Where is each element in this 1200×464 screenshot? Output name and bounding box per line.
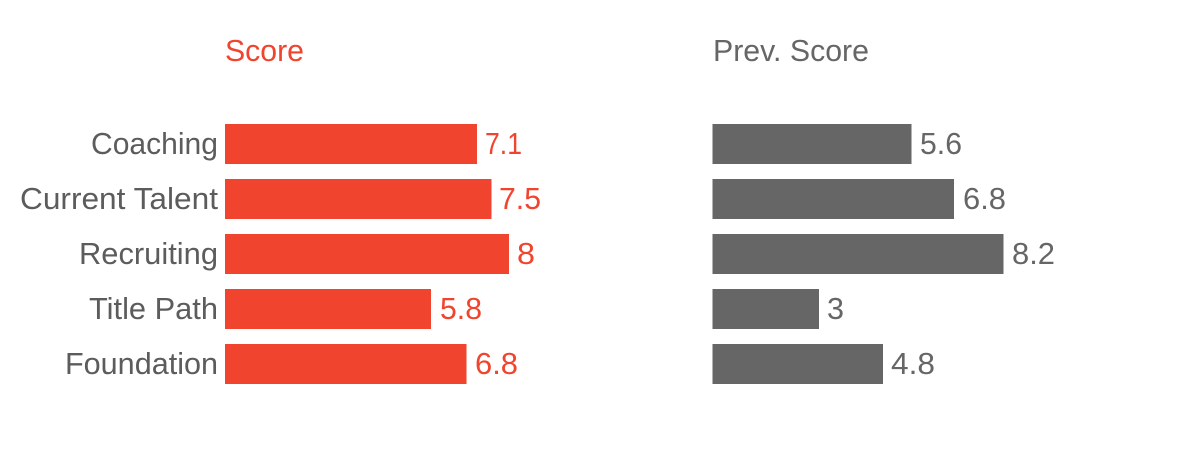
bar: Recruiting 8: [225, 234, 509, 274]
panel: Score bars: [225, 33, 541, 384]
value: 4.8: 4.8: [891, 346, 935, 381]
value: 6.8: 6.8: [963, 181, 1006, 216]
bar: Current Talent 7.5: [225, 179, 492, 219]
value: 8.2: 8.2: [1012, 236, 1055, 271]
value: 6.8: 6.8: [475, 346, 518, 381]
label: Current Talent: Current Talent: [20, 181, 218, 216]
value: 5.6: 5.6: [920, 126, 962, 161]
value: 3: 3: [827, 291, 844, 326]
bar: Title Path 3: [712, 289, 819, 329]
bar: Coaching 7.1: [225, 124, 477, 164]
label: Title Path: Title Path: [89, 291, 218, 326]
bar: Coaching 5.6: [712, 124, 912, 164]
label: Recruiting: Recruiting: [79, 236, 218, 271]
heading: Prev. Score: Prev. Score: [713, 33, 869, 68]
label: Foundation: Foundation: [65, 346, 218, 381]
bar: Foundation 4.8: [712, 344, 883, 384]
bar: Current Talent 6.8: [712, 179, 954, 219]
value: 5.8: 5.8: [440, 291, 482, 326]
bar: Title Path 5.8: [225, 289, 431, 329]
heading: Score: Score: [225, 33, 304, 68]
value: 7.1: 7.1: [485, 126, 522, 161]
bar: Foundation 6.8: [225, 344, 466, 384]
label: Coaching: Coaching: [91, 126, 218, 161]
value: 7.5: 7.5: [499, 181, 541, 216]
panel: Prev. Score bars: [712, 33, 1055, 384]
panel: category labels: [20, 126, 218, 381]
bar: Recruiting 8.2: [712, 234, 1004, 274]
value: 8: 8: [517, 236, 535, 271]
